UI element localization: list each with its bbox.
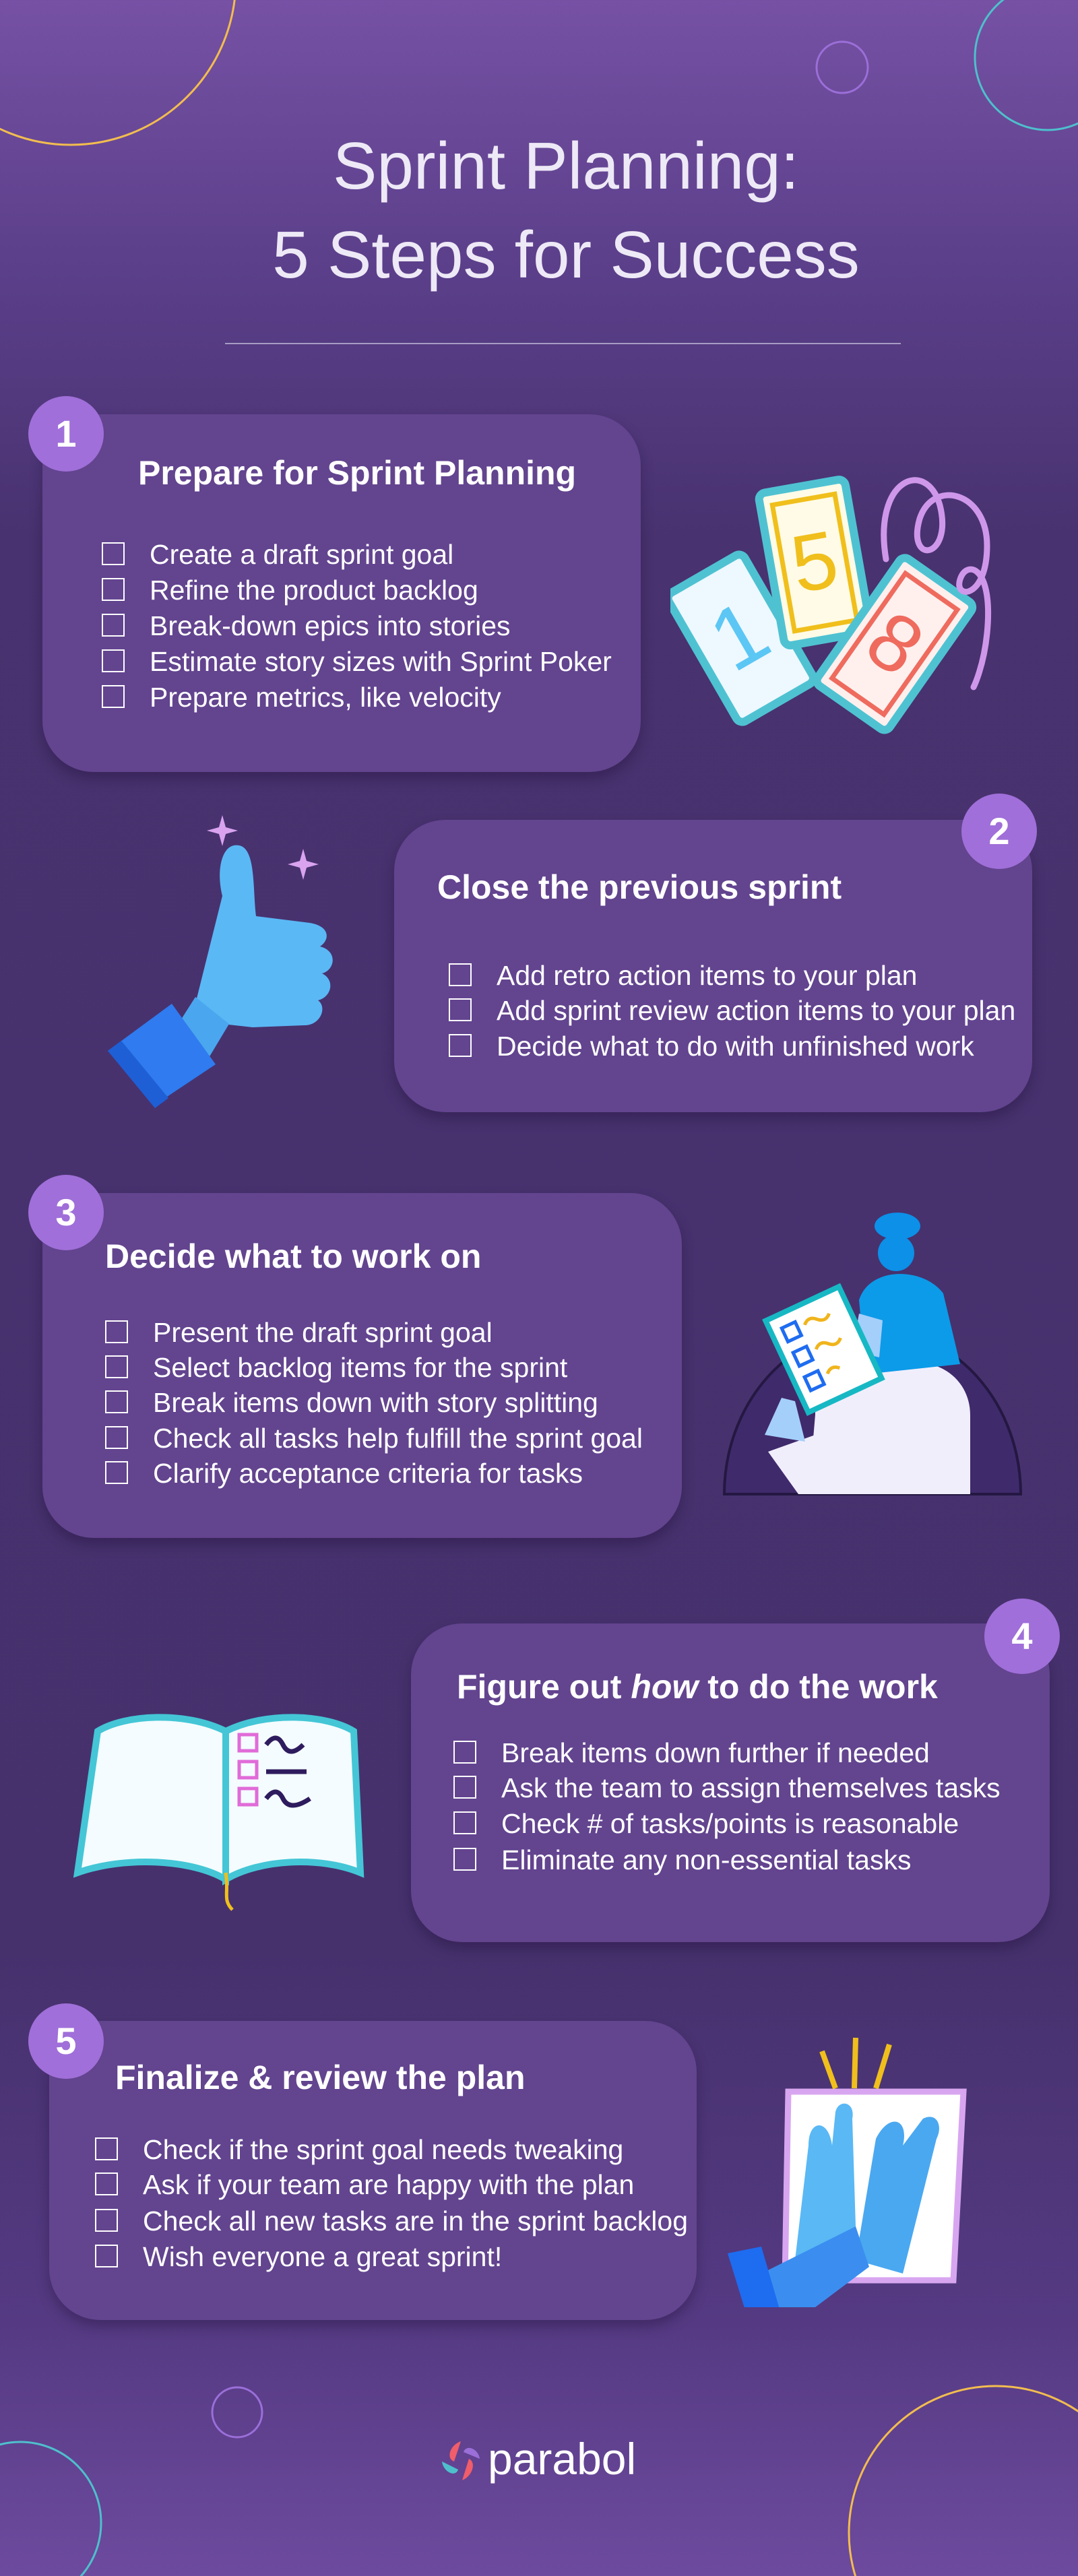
checklist 5: Ask if your team are happy with the plan (143, 2169, 634, 2200)
checklist 3: Clarify acceptance criteria for tasks (153, 1458, 583, 1489)
checklist 3 (105, 1317, 643, 1489)
panel: step 1 (42, 414, 641, 772)
heading 4: Figure out how to do the work (457, 1668, 938, 1706)
panel: step 5 (49, 2021, 697, 2320)
badge 2: 2 (988, 810, 1010, 852)
heading 5: Finalize & review the plan (115, 2059, 526, 2096)
heading 1: Prepare for Sprint Planning (138, 454, 576, 492)
checklist 1: Prepare metrics, like velocity (150, 682, 501, 713)
checklist 1: Create a draft sprint goal (150, 539, 453, 570)
checklist 1: Break-down epics into stories (150, 610, 511, 641)
icon: parabol logo (442, 2441, 480, 2480)
heading 3: Decide what to work on (105, 1237, 481, 1275)
checklist 1: Estimate story sizes with Sprint Poker (150, 646, 612, 677)
panel: step 4 (411, 1623, 1050, 1942)
badge 1: 1 (55, 412, 77, 455)
badge 1 (28, 396, 104, 472)
badge 3: 3 (55, 1191, 77, 1233)
checklist 1: Refine the product backlog (150, 575, 478, 606)
checklist 2 (449, 960, 1015, 1062)
badge 3 (28, 1175, 104, 1250)
checklist 3: Select backlog items for the sprint (153, 1352, 567, 1383)
checklist 5: Check if the sprint goal needs tweaking (143, 2134, 623, 2165)
checklist 2: Add retro action items to your plan (497, 960, 917, 991)
title: Sprint Planning: (333, 129, 799, 203)
badge 5: 5 (55, 2020, 77, 2062)
checklist 4: Eliminate any non-essential tasks (501, 1844, 911, 1875)
checklist 2: Add sprint review action items to your plan (497, 995, 1015, 1026)
icon: thumbs up glove (108, 815, 333, 1108)
icon: poker cards: 8 (851, 593, 939, 693)
logo: parabol (488, 2434, 636, 2484)
badge 4: 4 (1011, 1615, 1033, 1657)
checklist 4: Check # of tasks/points is reasonable (501, 1808, 959, 1839)
panel: step 2 (394, 820, 1032, 1112)
title (272, 129, 860, 292)
icon: open notebook (73, 1714, 364, 1911)
heading 2: Close the previous sprint (437, 868, 842, 906)
title: 5 Steps for Success (272, 218, 860, 292)
checklist 1 (102, 539, 612, 713)
checklist 3: Check all tasks help fulfill the sprint goal (153, 1423, 643, 1454)
checklist 3: Break items down with story splitting (153, 1387, 598, 1418)
checklist 4: Break items down further if needed (501, 1737, 930, 1768)
icon: poker cards: 5 (784, 513, 844, 610)
badge 5 (28, 2003, 104, 2079)
checklist 3: Present the draft sprint goal (153, 1317, 493, 1348)
panel: step 3 (42, 1193, 682, 1538)
icon: high five (728, 2037, 967, 2307)
icon: poker cards: 1 (693, 581, 785, 690)
icon: woman reading checklist (723, 1213, 1022, 1495)
checklist 5: Wish everyone a great sprint! (143, 2241, 502, 2272)
badge 4 (984, 1599, 1060, 1674)
icon: poker cards (670, 476, 992, 734)
checklist 5: Check all new tasks are in the sprint backlog (143, 2205, 688, 2236)
checklist 4: Ask the team to assign themselves tasks (501, 1772, 1001, 1803)
badge 2 (961, 794, 1037, 869)
checklist 4 (453, 1737, 1001, 1875)
checklist 5 (95, 2134, 688, 2272)
checklist 2: Decide what to do with unfinished work (497, 1031, 974, 1062)
